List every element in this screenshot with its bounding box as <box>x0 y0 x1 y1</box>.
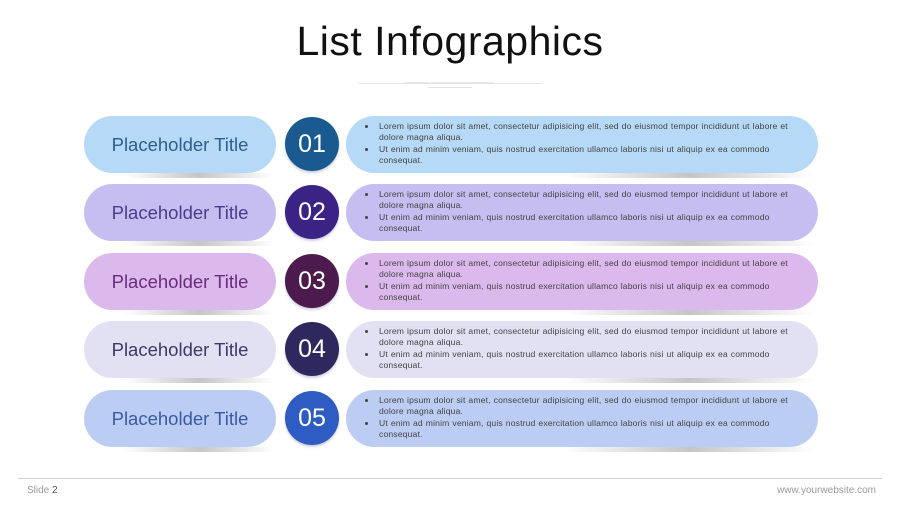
row 2 <box>84 184 818 246</box>
text pill 3: Ut enim ad minim veniam, quis nostrud exercitation ullamco laboris nisi ut aliquip ex ea commodo consequat. <box>379 281 770 302</box>
row 5 <box>84 390 818 452</box>
text pill 1 <box>346 116 818 173</box>
text pill 3: Lorem ipsum dolor sit amet, consectetur adipisicing elit, sed do eiusmod tempor incididunt ut labore et dolore magna aliqua. <box>379 258 788 279</box>
row 1 <box>84 116 818 178</box>
title pill 3: Placeholder Title <box>112 270 248 292</box>
text pill 2: Lorem ipsum dolor sit amet, consectetur adipisicing elit, sed do eiusmod tempor incididunt ut labore et dolore magna aliqua. <box>379 189 788 210</box>
text pill 1: Ut enim ad minim veniam, quis nostrud exercitation ullamco laboris nisi ut aliquip ex ea commodo consequat. <box>379 144 770 165</box>
text pill 3 <box>346 253 818 310</box>
text pill 5 <box>346 390 818 447</box>
number circle 01: 01 <box>298 130 326 158</box>
text pill 4: Lorem ipsum dolor sit amet, consectetur adipisicing elit, sed do eiusmod tempor incididunt ut labore et dolore magna aliqua. <box>379 326 788 347</box>
title pill 2: Placeholder Title <box>112 202 248 222</box>
title underline decoration <box>358 82 542 88</box>
text pill 1: Lorem ipsum dolor sit amet, consectetur adipisicing elit, sed do eiusmod tempor incididunt ut labore et dolore magna aliqua. <box>379 121 788 142</box>
text pill 2: Ut enim ad minim veniam, quis nostrud exercitation ullamco laboris nisi ut aliquip ex ea commodo consequat. <box>379 212 770 233</box>
title pill 3 <box>84 253 276 310</box>
text pill 5: Lorem ipsum dolor sit amet, consectetur adipisicing elit, sed do eiusmod tempor incididunt ut labore et dolore magna aliqua. <box>379 395 788 416</box>
text pill 2 <box>346 184 818 241</box>
number circle 02: 02 <box>298 198 326 226</box>
footer slide number: Slide 2 <box>27 485 58 496</box>
footer website: www.yourwebsite.com <box>777 485 876 496</box>
text pill 4: Ut enim ad minim veniam, quis nostrud exercitation ullamco laboris nisi ut aliquip ex ea commodo consequat. <box>379 349 770 370</box>
number circle 01 <box>285 117 339 171</box>
title pill 5: Placeholder Title <box>112 408 248 428</box>
row 4 <box>84 321 818 383</box>
title pill 1 <box>84 116 276 173</box>
number circle 03: 03 <box>298 266 326 294</box>
title pill 5 <box>84 390 276 447</box>
title pill 4 <box>84 321 276 378</box>
title pill 2 <box>84 184 276 241</box>
number circle 05: 05 <box>298 404 326 432</box>
title: List Infographics <box>296 18 604 64</box>
row 3 <box>84 253 818 315</box>
text pill 4 <box>346 321 818 378</box>
title pill 1: Placeholder Title <box>112 134 248 154</box>
text pill 5: Ut enim ad minim veniam, quis nostrud exercitation ullamco laboris nisi ut aliquip ex ea commodo consequat. <box>379 418 770 439</box>
number circle 04: 04 <box>298 334 326 362</box>
number circle 05 <box>285 391 339 445</box>
number circle 02 <box>285 185 339 239</box>
number circle 03 <box>285 254 339 308</box>
title pill 4: Placeholder Title <box>112 338 248 360</box>
number circle 04 <box>285 322 339 376</box>
